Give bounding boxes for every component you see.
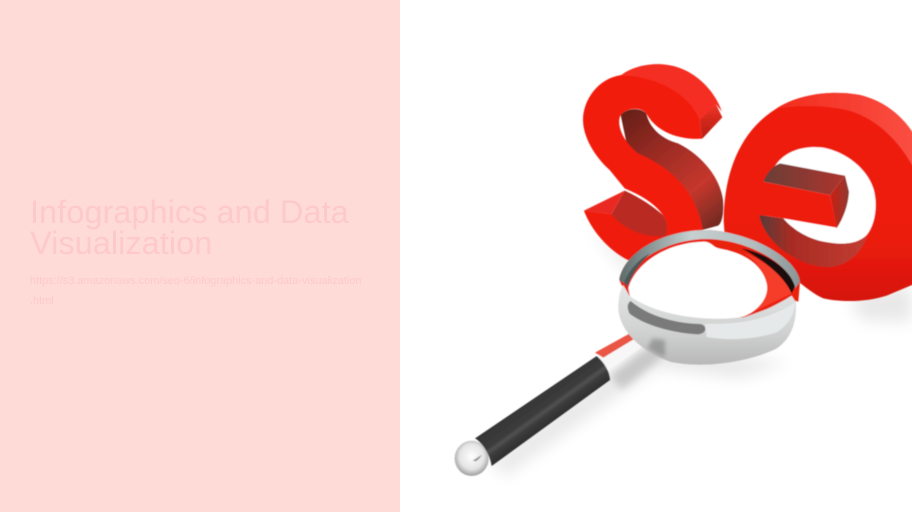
title <box>30 193 349 261</box>
source url: https://s3.amazonaws.com/seo-6/infographics-and-data-visualization <box>30 275 361 287</box>
dark reflection right <box>742 248 795 293</box>
handle grip <box>475 356 610 466</box>
magnifying glass <box>593 230 800 370</box>
crossbar top <box>763 163 845 195</box>
end cap <box>455 441 489 476</box>
cap detail <box>473 455 482 461</box>
stem shade on body <box>647 338 665 357</box>
bright red reflection <box>743 252 792 317</box>
panel: title background <box>0 0 400 512</box>
source url: .html <box>30 295 54 307</box>
dark reflection left <box>624 253 650 287</box>
gray band <box>628 301 705 334</box>
title: Infographics and Data <box>30 193 349 230</box>
crossbar face <box>757 182 837 228</box>
S end cap <box>700 104 722 139</box>
S lower front <box>584 211 703 260</box>
stem red stripe <box>595 330 645 358</box>
S lower wall <box>611 191 667 240</box>
source url <box>30 275 361 307</box>
letter O and crossbar <box>724 93 912 301</box>
S lower bevel <box>584 191 625 214</box>
O top bevel <box>777 93 912 182</box>
stem <box>593 330 657 370</box>
stem shadow <box>610 345 665 390</box>
lens body <box>618 285 796 365</box>
soft ground shadows <box>490 228 912 476</box>
inner rim red <box>619 230 800 318</box>
handle <box>455 356 610 476</box>
S inner wall <box>621 109 723 230</box>
title: Visualization <box>30 224 212 261</box>
S top bevel <box>621 64 722 121</box>
metal rim <box>619 230 800 288</box>
lens glass <box>628 242 767 319</box>
body highlight band <box>705 302 795 339</box>
O face <box>724 93 912 301</box>
silver front arc <box>618 285 796 365</box>
crossbar end cap <box>830 176 849 228</box>
O inner wall <box>759 215 867 267</box>
letter S <box>583 64 723 260</box>
S front face <box>583 75 703 260</box>
O hole <box>762 147 876 244</box>
